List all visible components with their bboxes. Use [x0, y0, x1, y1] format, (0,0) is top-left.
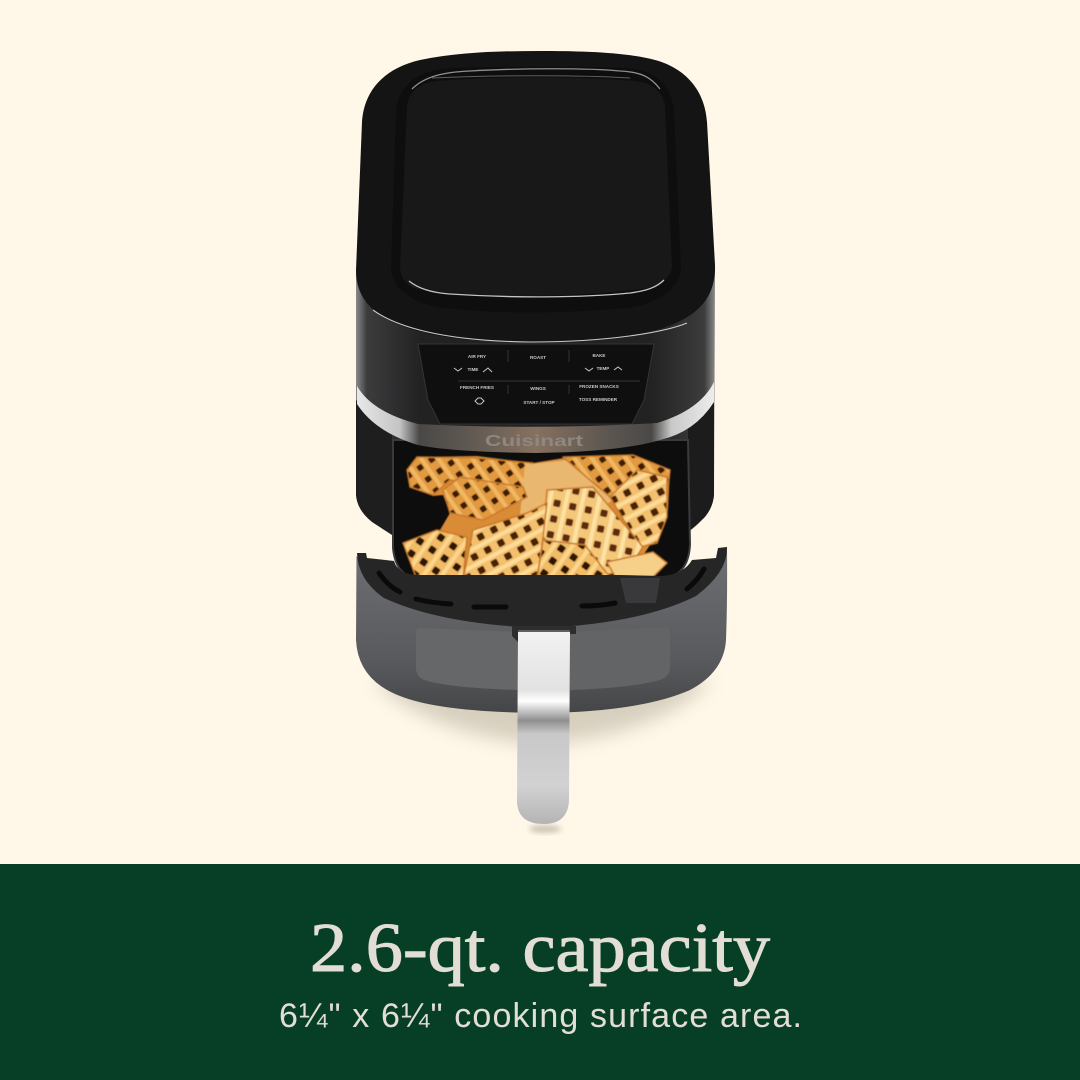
right lower side [688, 400, 714, 532]
subtitle: 6¼" x 6¼" cooking surface area. [279, 997, 802, 1035]
basket drawer [356, 547, 727, 824]
lid front edge highlight [373, 310, 687, 342]
title: 2.6-qt. capacity [310, 910, 770, 987]
front inset panel right [570, 627, 670, 690]
lid recess [400, 77, 672, 296]
left lower side [356, 400, 392, 535]
drawer top rim [357, 547, 727, 628]
rim slots [379, 569, 704, 607]
latch [620, 578, 660, 603]
background [0, 0, 1080, 864]
front inset panel [416, 628, 518, 690]
silver band [357, 382, 714, 453]
handle mount [512, 626, 576, 642]
control panel [418, 344, 654, 424]
brand name: Cuisinart [485, 433, 584, 450]
control labels: AIR FRY [468, 354, 486, 359]
drawer shadow [372, 680, 712, 745]
control labels: TIME [468, 367, 478, 372]
lid recess front highlight [409, 280, 664, 297]
waffle fries [403, 455, 670, 580]
main body [356, 270, 715, 532]
control arrows and dividers [454, 350, 640, 404]
control labels: FRENCH FRIES [460, 385, 494, 390]
handle [517, 632, 570, 824]
green caption band [0, 864, 1080, 1080]
control labels: START / STOP [523, 400, 555, 405]
air fryer product [356, 51, 727, 832]
control labels: BAKE [592, 353, 606, 358]
drawer front [356, 550, 727, 713]
lid inner rear highlight [432, 76, 630, 78]
lid recess rear highlight [412, 69, 660, 89]
control labels: TOSS REMINDER [579, 397, 618, 402]
lid [356, 51, 715, 342]
control labels: TEMP [597, 366, 609, 371]
basket interior [393, 440, 690, 580]
control labels: ROAST [530, 355, 546, 360]
control labels: FROZEN SNACKS [579, 384, 619, 389]
lid outer recess ring [391, 66, 681, 312]
control labels [460, 353, 619, 405]
control labels: WINGS [530, 386, 546, 391]
handle shadow [529, 826, 561, 832]
